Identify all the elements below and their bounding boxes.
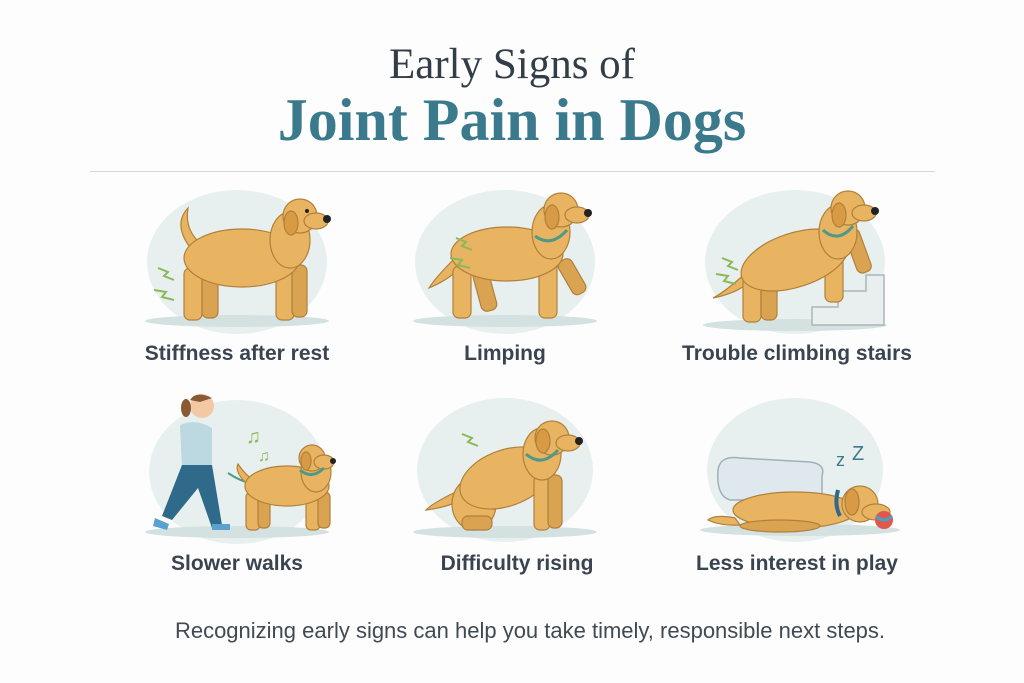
- icon: zzz: z: [836, 450, 845, 470]
- title line 2: Joint Pain in Dogs: [278, 87, 746, 153]
- label: stiffness: Stiffness after rest: [145, 342, 329, 365]
- footer: Recognizing early signs can help you take timely, responsible next steps.: [175, 618, 885, 643]
- label: limping: Limping: [464, 342, 546, 365]
- icon: stairs: [812, 275, 884, 325]
- label: stairs: Trouble climbing stairs: [682, 342, 912, 365]
- panel: limping: [413, 190, 597, 334]
- label: difficulty rising: Difficulty rising: [441, 552, 593, 575]
- panel: stiffness after rest: [145, 190, 331, 334]
- panel: trouble climbing stairs: [703, 190, 887, 334]
- panel: slower walks: ♫: [246, 426, 261, 448]
- icon: dog bed: [718, 458, 823, 500]
- icon: woman walking: [153, 394, 230, 530]
- icon: pain zigzag: [154, 268, 174, 300]
- label: slower walks: Slower walks: [171, 552, 303, 575]
- panel: less interest in play: Z: [852, 443, 864, 465]
- panel: difficulty rising: [413, 398, 597, 542]
- panel: slower walks: ♫: [258, 448, 270, 465]
- label: less interest: Less interest in play: [696, 552, 898, 575]
- panel: slower walks: [145, 394, 336, 544]
- title line 1: Early Signs of: [389, 41, 635, 88]
- panel: less interest in play: [700, 398, 900, 542]
- icon: ball: [875, 511, 893, 529]
